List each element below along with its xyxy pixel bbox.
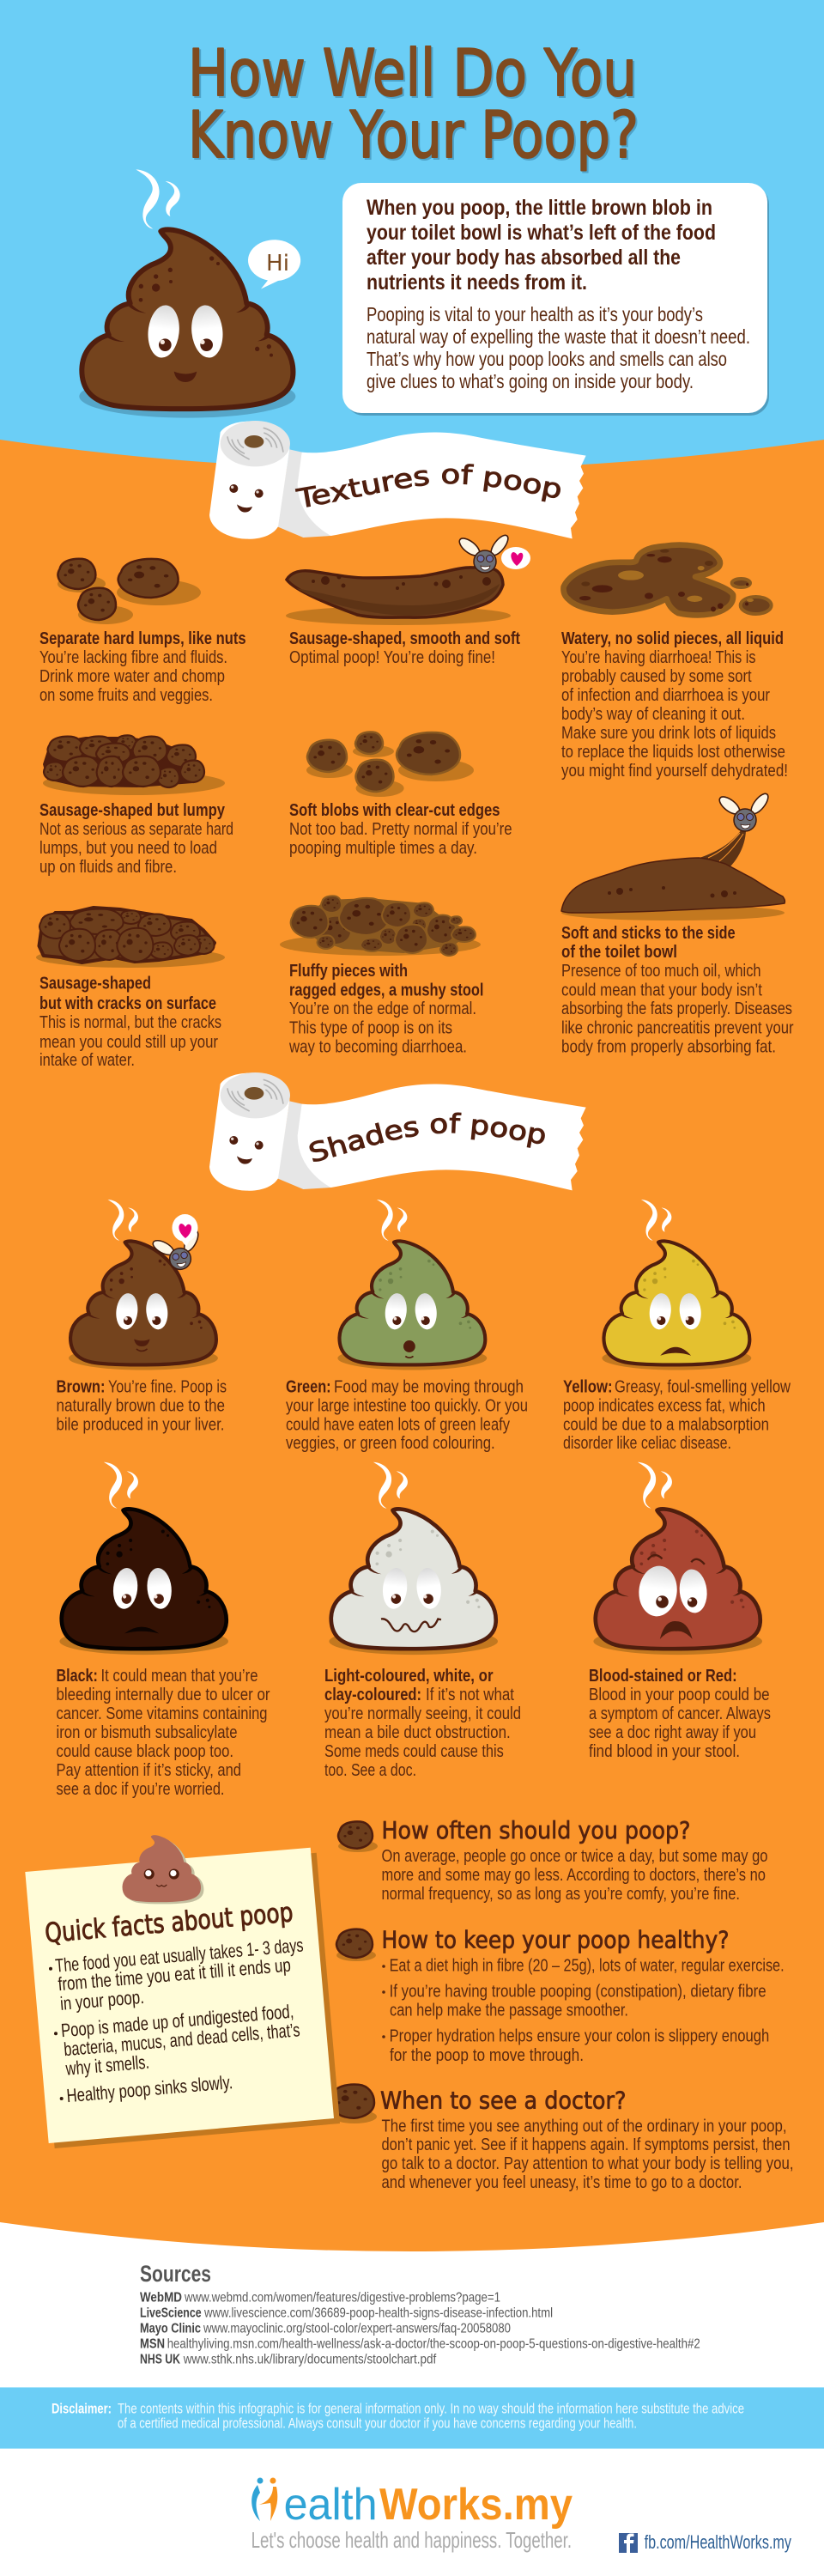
toilet roll banner: Shades of poop <box>209 1072 586 1191</box>
shade: red poop: find blood in your stool. <box>589 1742 740 1761</box>
texture: cracks on surface: intake of water. <box>39 1051 135 1070</box>
section: how often should you poop: normal frequency, so as long as you’re comfy, you’re fine. <box>381 1885 740 1904</box>
shade: black poop <box>57 1462 270 1799</box>
texture: watery: body’s way of cleaning it out. <box>561 705 745 724</box>
shade: yellow poop: Yellow: <box>563 1378 613 1397</box>
texture: watery: you might find yourself dehydrated! <box>561 762 788 781</box>
quick facts list: in your poop. <box>59 1986 145 2014</box>
shade: black poop: see a doc if you’re worried. <box>57 1780 225 1799</box>
section: how to keep your poop healthy: If you’re having trouble pooping (constipation), dietary fibre <box>390 1982 766 2001</box>
intro text panel: That’s why how you poop looks and smells can also <box>367 348 727 370</box>
texture: fluffy pieces: This type of poop is on its <box>289 1018 452 1037</box>
texture: fluffy pieces: ragged edges, a mushy stool <box>289 981 484 999</box>
icon: small poop lump <box>336 1929 376 1961</box>
texture: cracks on surface: but with cracks on surface <box>39 994 216 1013</box>
shade: red poop: see a doc right away if you <box>589 1723 756 1742</box>
illustration: cracked sausage <box>36 908 225 968</box>
texture: sausage smooth and soft <box>286 532 530 667</box>
texture: separate hard lumps: on some fruits and veggies. <box>39 686 213 705</box>
intro text panel: your toilet bowl is what’s left of the food <box>367 221 716 245</box>
panel: quick facts note <box>25 1836 340 2148</box>
shade: black poop: Black: <box>57 1667 98 1686</box>
title: How Well Do You <box>190 37 639 112</box>
background: blue header <box>0 0 824 515</box>
texture: soft blobs: Not too bad. Pretty normal if you’re <box>289 820 512 839</box>
speech bubble: Hi: Hi <box>266 251 289 276</box>
quick facts list: from the time you eat it till it ends up <box>58 1954 292 1995</box>
icon: fly with heart on brown poop <box>149 1214 207 1274</box>
texture: cracks on surface <box>36 908 225 1070</box>
background: orange main panel <box>0 440 824 2251</box>
texture: fluffy pieces: Fluffy pieces with <box>289 962 408 981</box>
shade: brown poop: Brown: <box>57 1378 105 1397</box>
section: when to see a doctor: When to see a doctor? <box>380 2087 627 2114</box>
texture: sausage lumpy <box>39 735 233 877</box>
toilet roll banner: Shades of poop: Shades of poop <box>309 1113 545 1162</box>
texture: watery: to replace the liquids lost otherwise <box>561 743 785 762</box>
logo: HealthWorks.my: ealth <box>284 2480 378 2530</box>
title: Know Your Poop? <box>190 99 640 174</box>
texture: soft blobs <box>289 732 512 858</box>
logo: HealthWorks.my: Works.my <box>379 2480 573 2530</box>
texture: separate hard lumps: Drink more water and chomp <box>39 667 225 686</box>
illustration: watery blobs <box>564 545 772 615</box>
texture: fluffy pieces <box>280 896 484 1056</box>
illustration: fluffy mushy pieces <box>280 896 481 956</box>
illustration: sticky poop with fly <box>561 829 785 920</box>
section: how often should you poop <box>338 1816 767 1904</box>
quick facts list <box>49 1935 304 2106</box>
texture: soft and sticky <box>561 791 794 1056</box>
intro text panel: When you poop, the little brown blob in <box>367 196 712 220</box>
texture: soft blobs: pooping multiple times a day. <box>289 839 477 858</box>
sources: MSN <box>140 2337 165 2352</box>
disclaimer band: of a certified medical professional. Always consult your doctor if you have concerns regarding your health. <box>118 2415 637 2432</box>
shade: brown poop: naturally brown due to the <box>57 1396 225 1415</box>
texture: soft and sticky: Soft and sticks to the side <box>561 924 736 943</box>
texture: sausage lumpy: up on fluids and fibre. <box>39 858 177 877</box>
texture: cracks on surface: This is normal, but the cracks <box>39 1013 221 1032</box>
sources: Mayo Clinic <box>140 2322 201 2336</box>
texture: fluffy pieces: way to becoming diarrhoea. <box>288 1037 467 1056</box>
quick facts list: The food you eat usually takes 1- 3 days <box>54 1935 304 1977</box>
sources: www.livescience.com/36689-poop-health-signs-disease-infection.html <box>203 2306 553 2321</box>
title: Know Your Poop? <box>188 97 639 173</box>
texture: watery: Make sure you drink lots of liquids <box>561 724 776 743</box>
sources: NHS UK <box>140 2353 180 2367</box>
texture: watery: of infection and diarrhoea is your <box>561 686 770 705</box>
texture: sausage smooth and soft: Optimal poop! You’re doing fine! <box>289 648 495 667</box>
intro text panel: after your body has absorbed all the <box>367 246 681 270</box>
icon: small poop lump <box>338 1821 378 1852</box>
shade: yellow poop: disorder like celiac disease. <box>563 1434 731 1453</box>
shade: white poop: Light-coloured, white, or <box>324 1667 494 1686</box>
section: when to see a doctor <box>330 2085 793 2192</box>
speech bubble: Hi <box>248 240 300 289</box>
shade: white poop: clay-coloured: <box>324 1686 421 1704</box>
texture: cracks on surface: mean you could still up your <box>39 1033 218 1052</box>
quick facts list: bacteria, mucus, and dead cells, that’s <box>63 2019 300 2060</box>
shade: green poop: your large intestine too quickly. Or you <box>286 1396 528 1415</box>
logo: HealthWorks.my <box>251 2478 573 2530</box>
texture: soft and sticky: body from properly absorbing fat. <box>561 1037 776 1056</box>
quick facts list: Healthy poop sinks slowly. <box>66 2071 233 2106</box>
shade: brown poop: You’re fine. Poop is <box>108 1378 227 1397</box>
illustration: lumpy sausage <box>43 735 225 795</box>
texture: watery: probably caused by some sort <box>561 667 752 686</box>
shade: white poop: too. See a doc. <box>324 1761 416 1780</box>
section: when to see a doctor: and whenever you feel uneasy, it’s time to go to a doctor. <box>381 2173 742 2192</box>
shade: green poop: Food may be moving through <box>334 1378 524 1397</box>
shade: white poop <box>324 1462 521 1780</box>
illustration: soft blobs <box>306 732 474 797</box>
texture: separate hard lumps: Separate hard lumps, like nuts <box>39 629 246 648</box>
hero poop mascot <box>79 169 295 418</box>
illustration: three hard lumps <box>58 559 201 624</box>
toilet roll banner: Textures of poop <box>209 421 586 539</box>
texture: sausage lumpy: Sausage-shaped but lumpy <box>39 801 226 820</box>
shade: brown poop <box>57 1200 227 1434</box>
section: how to keep your poop healthy: How to keep your poop healthy? <box>381 1925 730 1954</box>
sources <box>140 2261 700 2367</box>
intro text panel: Pooping is vital to your health as it’s your body’s <box>367 303 703 325</box>
intro text panel: nutrients it needs from it. <box>367 270 587 295</box>
disclaimer band: Disclaimer: <box>52 2401 112 2417</box>
sources: healthyliving.msn.com/health-wellness/ask-a-doctor/the-scoop-on-poop-5-questions-on-digestive-health#2 <box>167 2337 700 2352</box>
texture: fluffy pieces: You’re on the edge of normal. <box>289 999 476 1018</box>
title: How Well Do You <box>188 35 637 111</box>
texture: sausage lumpy: Not as serious as separate hard <box>39 820 233 839</box>
section: how to keep your poop healthy: for the poop to move through. <box>390 2046 584 2065</box>
texture: sausage lumpy: lumps, but you need to load <box>39 839 217 858</box>
texture: watery <box>561 545 788 781</box>
sources: www.sthk.nhs.uk/library/documents/stoolchart.pdf <box>183 2353 437 2367</box>
icon: fly with heart <box>457 532 530 573</box>
sources: Sources <box>140 2261 211 2287</box>
sources: LiveScience <box>140 2306 202 2321</box>
intro text panel: give clues to what’s going on inside your body. <box>367 370 694 392</box>
sources: WebMD <box>140 2291 182 2306</box>
section: how often should you poop: How often should you poop? <box>381 1816 690 1844</box>
shade: red poop: Blood in your poop could be <box>589 1686 770 1704</box>
shade: black poop: iron or bismuth subsalicylate <box>57 1723 237 1742</box>
title <box>188 35 640 174</box>
icon: pink poop <box>124 1836 203 1903</box>
shade: black poop: could cause black poop too. <box>57 1742 233 1761</box>
texture: soft and sticky: Presence of too much oil, which <box>561 962 761 981</box>
tagline: Let's choose health and happiness. Together. <box>251 2527 572 2553</box>
texture: watery: You’re having diarrhoea! This is <box>561 648 755 667</box>
texture: watery: Watery, no solid pieces, all liquid <box>561 629 784 648</box>
shade: green poop <box>286 1200 528 1453</box>
shade: green poop: Green: <box>286 1378 331 1397</box>
shade: brown poop: bile produced in your liver. <box>57 1415 225 1434</box>
texture: sausage smooth and soft: Sausage-shaped, smooth and soft <box>289 629 520 648</box>
heading: quick facts about poop: Quick facts about poop <box>44 1897 294 1949</box>
intro text panel <box>342 183 769 416</box>
shade: red poop: Blood-stained or Red: <box>589 1667 737 1686</box>
quick facts list: why it smells. <box>64 2051 150 2080</box>
shade: yellow poop <box>563 1200 791 1453</box>
sources: www.mayoclinic.org/stool-color/expert-answers/faq-20058080 <box>203 2322 511 2336</box>
shade: white poop: Some meds could cause this <box>324 1742 504 1761</box>
shade: black poop: bleeding internally due to ulcer or <box>57 1686 270 1704</box>
shade: green poop: could have eaten lots of green leafy <box>286 1415 510 1434</box>
quick facts list: Poop is made up of undigested food, <box>60 2001 294 2041</box>
icon: small poop lump behind note <box>330 2085 377 2123</box>
shade: red poop <box>589 1462 771 1761</box>
texture: soft and sticky: of the toilet bowl <box>561 943 677 962</box>
shade: black poop: Pay attention if it’s sticky, and <box>57 1761 241 1780</box>
shade: white poop: mean a bile duct obstruction. <box>324 1723 511 1742</box>
shade: white poop: If it’s not what <box>426 1686 514 1704</box>
section: how to keep your poop healthy: can help make the passage smoother. <box>390 2002 628 2020</box>
disclaimer band <box>0 2387 824 2449</box>
section: how to keep your poop healthy <box>336 1925 785 2065</box>
shade: black poop: cancer. Some vitamins containing <box>57 1704 268 1723</box>
shade: yellow poop: could be due to a malabsorption <box>563 1415 769 1434</box>
shade: red poop: a symptom of cancer. Always <box>589 1704 771 1723</box>
shade: green poop: veggies, or green food colouring. <box>286 1434 495 1453</box>
texture: separate hard lumps <box>39 559 246 705</box>
toilet roll banner: Textures of poop: Textures of poop <box>295 464 560 507</box>
texture: soft blobs: Soft blobs with clear-cut edges <box>289 801 500 820</box>
texture: cracks on surface: Sausage-shaped <box>39 975 151 993</box>
sources: www.webmd.com/women/features/digestive-problems?page=1 <box>184 2291 500 2306</box>
texture: separate hard lumps: You’re lacking fibre and fluids. <box>39 648 227 667</box>
shade: yellow poop: poop indicates excess fat, which <box>563 1396 766 1415</box>
icon: stuck fly <box>717 791 771 831</box>
shade: black poop: It could mean that you’re <box>101 1667 258 1686</box>
shade: white poop: you’re normally seeing, it could <box>324 1704 521 1723</box>
illustration: smooth sausage <box>286 568 511 625</box>
shade: yellow poop: Greasy, foul-smelling yellow <box>615 1378 791 1397</box>
texture: soft and sticky: could mean that your body isn’t <box>561 981 762 999</box>
